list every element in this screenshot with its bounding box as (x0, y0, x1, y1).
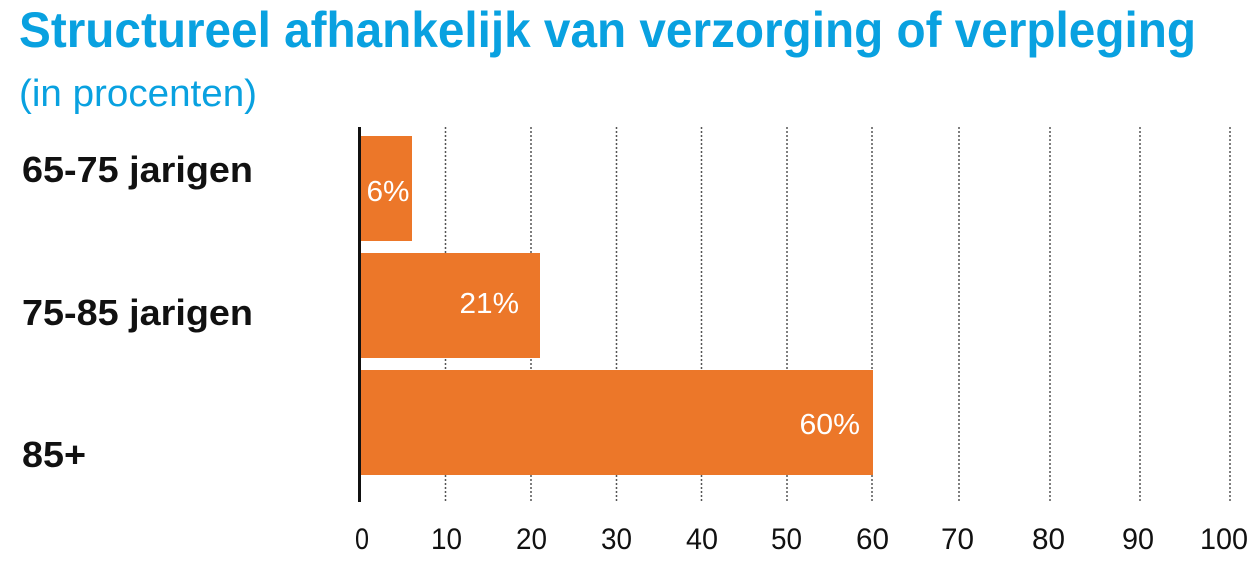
x axis labels: 40 (686, 523, 718, 556)
chart: horizontal bar chart (22, 127, 1248, 556)
x axis labels: 0 (355, 523, 369, 556)
bar: 85+: 60% (800, 409, 860, 441)
x axis labels: 70 (941, 523, 974, 556)
category label: 75-85 jarigen: 75-85 jarigen (22, 292, 253, 333)
x axis labels (355, 523, 1248, 556)
bar: 65-75 jarigen: 6% (366, 176, 410, 208)
bar: 75-85 jarigen: 21% (460, 288, 519, 320)
x axis labels: 50 (771, 523, 802, 556)
subtitle: (in procenten) (19, 73, 257, 115)
x axis labels: 20 (516, 523, 547, 556)
bar: 75-85 jarigen (360, 253, 540, 358)
x axis labels: 100 (1200, 523, 1248, 556)
x axis labels: 80 (1032, 523, 1065, 556)
x axis labels: 30 (601, 523, 632, 556)
category label: 85+: 85+ (22, 434, 86, 475)
x axis labels: 90 (1122, 523, 1154, 556)
gridlines (446, 127, 1230, 502)
x axis labels: 60 (856, 523, 889, 556)
bar: 85+ (360, 370, 873, 475)
x axis labels: 10 (431, 523, 462, 556)
title: Structureel afhankelijk van verzorging of verpleging (19, 2, 1196, 58)
category label: 65-75 jarigen: 65-75 jarigen (22, 149, 253, 190)
bar: 65-75 jarigen (360, 136, 412, 241)
y axis (358, 127, 361, 502)
